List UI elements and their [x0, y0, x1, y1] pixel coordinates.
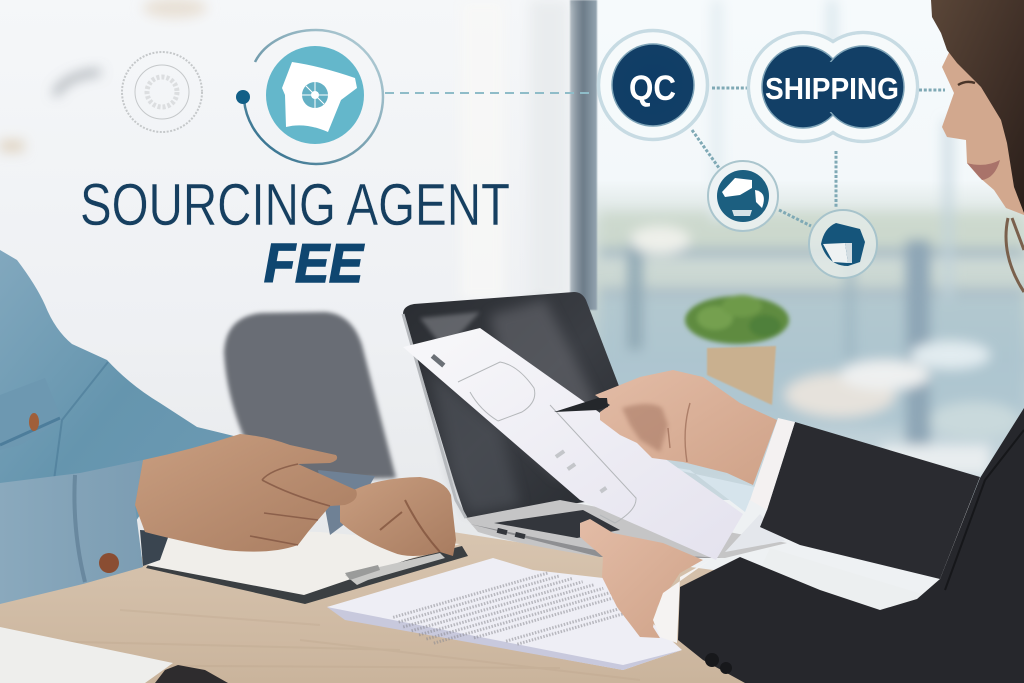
held document — [403, 328, 743, 560]
laptop ports — [497, 528, 508, 535]
icon: globe circle — [708, 161, 778, 231]
person left: other sleeve and resting hand — [318, 470, 456, 556]
teal disc — [266, 46, 364, 144]
office chair — [224, 312, 396, 480]
hair strand — [1006, 218, 1024, 292]
jacket sleeve — [0, 460, 143, 604]
person right: neck and face — [931, 0, 1024, 292]
laptop lid edge — [403, 314, 466, 518]
person right: jacket body and lower arm — [678, 408, 1024, 683]
person right: upper sleeve — [760, 422, 980, 579]
faint stamp graphic — [122, 52, 202, 132]
eye — [958, 82, 975, 85]
ring end dot — [236, 90, 250, 104]
jacket button — [29, 413, 39, 431]
t-shirt — [282, 62, 357, 132]
person right: shirt cuff lower — [653, 560, 710, 643]
document on desk — [327, 551, 682, 675]
person left: denim jacket — [0, 250, 238, 604]
laptop — [403, 292, 787, 558]
notebook bottom left — [0, 627, 228, 683]
person right: lower hand — [580, 519, 703, 638]
person right: hand holding pen — [554, 370, 777, 485]
sleeve button — [99, 553, 119, 573]
cd emblem — [302, 82, 328, 108]
plant on window sill — [685, 295, 789, 405]
title: sourcing agent: SOURCING AGENT — [80, 172, 510, 238]
shadowed palm — [622, 404, 668, 452]
orbit ring — [244, 30, 383, 164]
lips — [967, 160, 1000, 180]
badge: shipping — [748, 32, 918, 142]
badge: QC — [598, 30, 708, 140]
dark inner cuff — [140, 530, 170, 566]
hair — [931, 0, 1024, 213]
clipboard clip — [345, 553, 445, 585]
jacket torso — [0, 250, 238, 540]
person right: shirt cuff upper — [750, 418, 795, 510]
keyboard — [494, 510, 620, 538]
pen — [554, 398, 608, 412]
title: fee: FEE — [264, 232, 365, 294]
icon: sourcing t-shirt circle — [236, 30, 383, 164]
background: office wall — [0, 0, 572, 560]
laptop screen — [403, 292, 632, 518]
light surface behind upper hand — [640, 462, 755, 512]
label: SHIPPING — [765, 71, 899, 106]
window column — [570, 0, 597, 310]
dotted connectors — [692, 88, 945, 226]
clipboard with notepad — [146, 528, 468, 604]
blurred wall objects — [0, 0, 568, 300]
desk — [0, 530, 940, 683]
label: QC — [629, 69, 676, 108]
background: window view — [590, 0, 1024, 500]
person left: pointing hand — [135, 434, 357, 552]
laptop base — [466, 500, 787, 558]
icon: box circle — [809, 210, 877, 278]
dashed connector from sourcing circle to QC — [385, 92, 593, 94]
